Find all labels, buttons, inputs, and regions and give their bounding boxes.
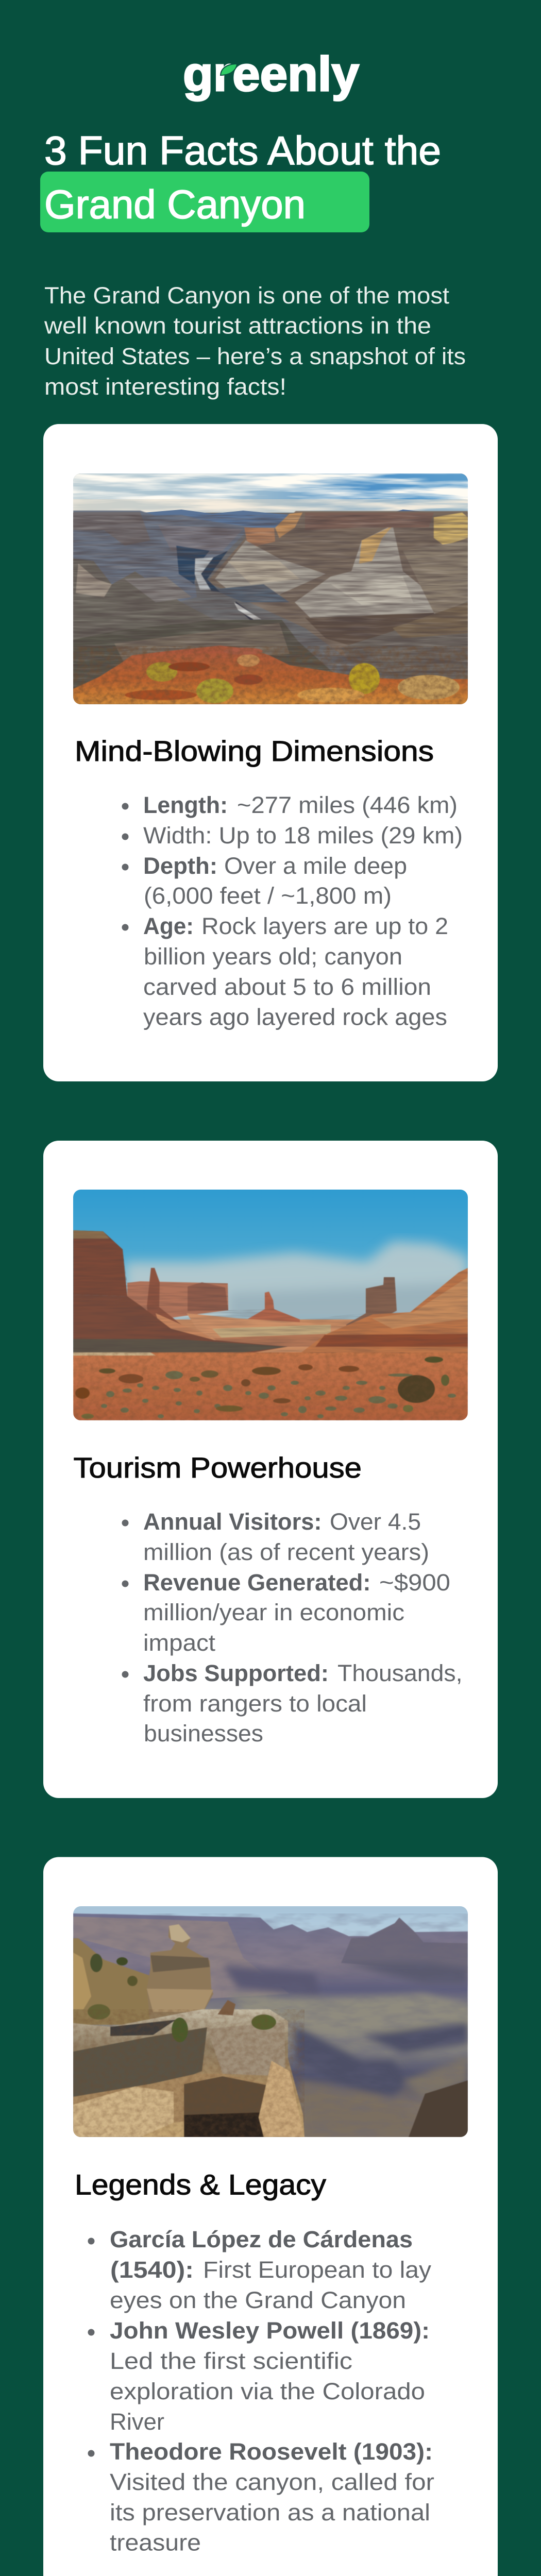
title highlight bar: [40, 172, 369, 232]
list: tourism facts: Revenue Generated:: [143, 1569, 371, 1596]
heading: Tourism Powerhouse: Tourism Powerhouse: [73, 1451, 362, 1484]
list: tourism facts: Thousands,: [337, 1660, 463, 1686]
heading: Legends & Legacy: Legends & Legacy: [75, 2168, 326, 2201]
list: tourism facts: ~$900: [379, 1569, 450, 1596]
intro text: [44, 282, 466, 400]
list: historic figures: treasure: [110, 2530, 201, 2555]
logo: greenly: greenly: [183, 47, 359, 101]
list: tourism facts: [122, 1509, 463, 1747]
title line 2: Grand Canyon: [44, 181, 306, 227]
list: historic figures: [88, 2226, 434, 2555]
list: historic figures: First European to lay: [203, 2257, 432, 2283]
list: dimensions facts: Rock layers are up to 2: [201, 913, 448, 939]
list: historic figures: (1540):: [110, 2257, 194, 2283]
list: tourism facts: impact: [143, 1630, 216, 1656]
list: dimensions facts: [122, 792, 463, 1030]
photo: red desert buttes: [73, 1190, 468, 1420]
photo: canyon rim hoodoo: [73, 1906, 468, 2137]
list: historic figures: eyes on the Grand Canyon: [110, 2287, 406, 2313]
intro text: most interesting facts!: [44, 374, 286, 400]
list: dimensions facts: Length:: [143, 792, 228, 818]
list: dimensions facts: Age:: [143, 913, 194, 939]
list: historic figures: Led the first scientific: [110, 2348, 352, 2374]
intro text: well known tourist attractions in the: [44, 312, 431, 339]
intro text: United States – here’s a snapshot of its: [44, 343, 466, 369]
list: historic figures: River: [110, 2409, 164, 2435]
list: dimensions facts: (6,000 feet / ~1,800 m): [144, 883, 392, 909]
panel: mind-blowing dimensions: [43, 424, 498, 1081]
title: [40, 128, 441, 232]
panel: tourism powerhouse: [43, 1141, 498, 1798]
list: historic figures: Theodore Roosevelt (1903):: [110, 2438, 433, 2465]
list: tourism facts: Over 4.5: [330, 1509, 421, 1535]
title line 1: 3 Fun Facts About the: [44, 128, 441, 173]
list: tourism facts: from rangers to local: [143, 1690, 367, 1717]
list: tourism facts: Annual Visitors:: [143, 1509, 322, 1535]
list: dimensions facts: Over a mile deep: [224, 853, 407, 879]
intro text: The Grand Canyon is one of the most: [44, 282, 450, 309]
list: dimensions facts: years ago layered rock ages: [143, 1004, 447, 1030]
list: historic figures: exploration via the Colorado: [110, 2378, 425, 2404]
list: historic figures: Visited the canyon, called for: [110, 2469, 434, 2495]
list: tourism facts: million/year in economic: [143, 1599, 404, 1625]
list: dimensions facts: carved about 5 to 6 million: [143, 974, 431, 1000]
list: dimensions facts: billion years old; canyon: [144, 943, 402, 970]
panel: legends and legacy: [43, 1857, 498, 2576]
list: tourism facts: million (as of recent years): [143, 1539, 429, 1565]
list: dimensions facts: ~277 miles (446 km): [237, 792, 458, 818]
list: dimensions facts: Width: Up to 18 miles (29 km): [143, 822, 463, 849]
list: tourism facts: Jobs Supported:: [143, 1660, 329, 1686]
list: historic figures: García López de Cárdenas: [110, 2226, 413, 2252]
heading: Mind-Blowing Dimensions: Mind-Blowing Dimensions: [75, 735, 434, 767]
photo: canyon and river at sunset: [73, 473, 468, 704]
list: dimensions facts: Depth:: [143, 853, 217, 879]
list: tourism facts: businesses: [144, 1720, 263, 1747]
list: historic figures: its preservation as a national: [110, 2499, 430, 2526]
list: historic figures: John Wesley Powell (1869):: [110, 2317, 430, 2344]
